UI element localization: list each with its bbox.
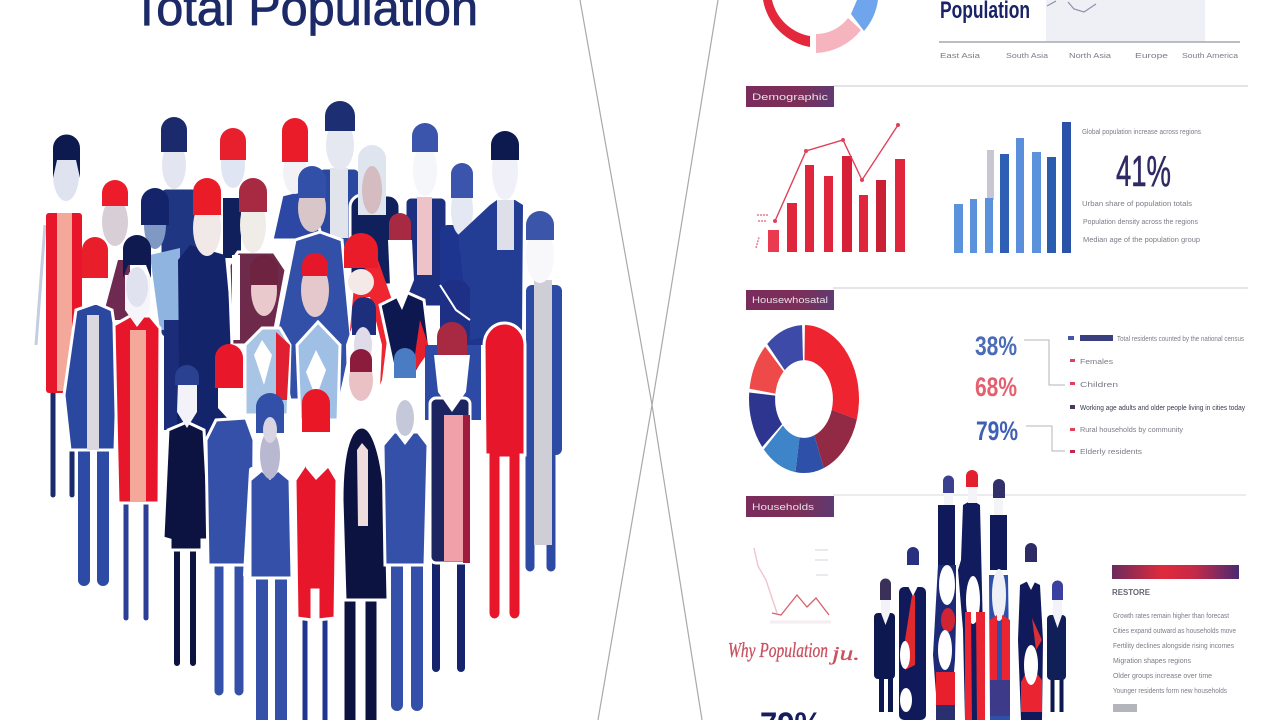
illustration: crowd of people <box>36 101 562 720</box>
person: back row navy hair <box>160 117 198 338</box>
small line chart <box>754 548 831 622</box>
figure 3 <box>933 476 956 720</box>
axis with labels: Europe <box>1135 53 1168 60</box>
segment: pink <box>816 18 861 53</box>
segment: navy blue <box>767 325 803 370</box>
panel copy: Growth rates remain higher than forecast <box>1113 613 1229 620</box>
handwritten caption: Why Population <box>728 638 828 662</box>
person: navy body pink centre <box>405 123 447 307</box>
list of notes: Working age adults and older people living in cities today <box>1080 405 1245 412</box>
person: white pale blue <box>297 322 340 420</box>
axis with labels: South Asia <box>1006 53 1048 60</box>
section header: demographic <box>746 86 1248 107</box>
segment: blue <box>851 0 878 31</box>
person: white hair <box>350 145 400 285</box>
segment: blue <box>795 435 824 473</box>
handwritten caption: ju. <box>828 643 860 665</box>
panel copy: Fertility declines alongside rising incomes <box>1113 643 1234 650</box>
list of notes: Rural households by community <box>1080 427 1184 434</box>
figure 6 <box>1018 543 1043 720</box>
segment: maroon <box>814 410 857 468</box>
donut chart: segments <box>749 325 859 473</box>
bar and line chart: red <box>756 123 905 252</box>
stat: 41% with notes: Urban share of population totals <box>1082 201 1193 208</box>
figure 7 <box>1047 580 1066 712</box>
segment: coral <box>750 347 784 394</box>
person: red full figure <box>484 323 525 620</box>
small tag <box>1113 704 1137 712</box>
figure 2 <box>899 547 926 720</box>
segment: red <box>804 325 859 419</box>
person: maroon hair small <box>349 349 373 401</box>
person: mid blue right <box>425 280 481 420</box>
connectors <box>1024 340 1065 451</box>
section header: demographic: Demographic <box>752 92 829 102</box>
person: back right dark hair <box>458 131 523 340</box>
panel heading: RESTORE <box>1112 588 1151 597</box>
segment: navy <box>749 393 782 447</box>
panel copy: Younger residents form new households <box>1113 688 1227 695</box>
axis with labels: South America <box>1182 53 1238 60</box>
person: front blue centre <box>246 393 292 720</box>
person: front dark centre <box>342 427 388 720</box>
person: blue hair mid <box>440 163 495 345</box>
stat: 41% with notes: Median age of the population group <box>1083 237 1200 244</box>
bar chart: blue <box>954 122 1071 253</box>
side text panel <box>1112 565 1239 712</box>
map outline <box>1047 1 1096 12</box>
person: back row red hair centre <box>272 118 322 240</box>
number: 41%: 41% <box>1116 147 1171 196</box>
figure 1 <box>874 578 895 712</box>
person: second row red dress <box>114 235 160 618</box>
percentages: 38% <box>975 331 1017 361</box>
axis with labels: North Asia <box>1069 53 1111 60</box>
person: navy hair left <box>141 188 188 430</box>
person: navy hair white body <box>346 297 382 430</box>
person: second row far left blue <box>64 237 118 580</box>
person: red hair left maroon <box>102 180 130 320</box>
section header: demographics <box>746 288 1248 310</box>
person: red hair face light <box>301 253 329 317</box>
panel copy: Older groups increase over time <box>1113 673 1212 680</box>
donut chart: top partial <box>763 0 878 53</box>
section header: households: Households <box>752 502 815 512</box>
stat: 41% with notes: Global population increase across regions <box>1082 129 1201 136</box>
list of notes: Total residents counted by the national census <box>1117 336 1244 343</box>
axis with labels <box>939 42 1240 60</box>
figure 4 <box>958 470 985 720</box>
person: blue body red fringe <box>276 166 352 400</box>
percentages: 68% <box>975 372 1017 402</box>
person: front blue red hair <box>206 344 254 691</box>
panel copy: Migration shapes regions <box>1113 658 1191 665</box>
section header: households <box>746 495 1246 517</box>
person: centre navy front-left <box>163 365 210 663</box>
person: back row centre navy hair <box>318 101 360 253</box>
list of notes: Children <box>1080 382 1118 389</box>
person: maroon hair light-blue <box>245 255 290 415</box>
percentages: 79% <box>976 416 1018 446</box>
person: maroon hair tall <box>229 178 286 345</box>
trend line <box>775 125 898 221</box>
section header: demographics: Housewhosatal <box>752 295 828 305</box>
person: big red hair <box>344 233 392 410</box>
panel copy <box>1113 613 1236 695</box>
person: far right blue <box>526 211 562 567</box>
list of notes <box>1068 335 1245 456</box>
percentages <box>975 331 1018 446</box>
figure 5 <box>989 479 1010 720</box>
list of notes: Females <box>1080 359 1114 366</box>
stat: 41% with notes: Population density across the regions <box>1083 219 1198 226</box>
axis with labels: East Asia <box>940 53 980 60</box>
person: front red dress <box>295 389 337 720</box>
person: navy body red hair <box>178 178 232 470</box>
list of notes: Elderly residents <box>1080 449 1143 456</box>
person: navy with white face dark red hair <box>380 213 430 375</box>
stat: 41% with notes <box>1082 129 1201 244</box>
divider lines <box>580 0 718 720</box>
illustration: small group of people <box>874 470 1066 720</box>
panel copy: Cities expand outward as households move <box>1113 628 1236 635</box>
person: far left <box>36 134 82 495</box>
map panel <box>1046 0 1205 42</box>
person: front right blue <box>383 348 428 705</box>
segment: red <box>763 0 810 47</box>
person: navy pink right <box>430 322 470 668</box>
segment: light blue <box>764 425 799 472</box>
gradient bar <box>1112 565 1239 579</box>
person: back row red hair <box>220 128 246 258</box>
